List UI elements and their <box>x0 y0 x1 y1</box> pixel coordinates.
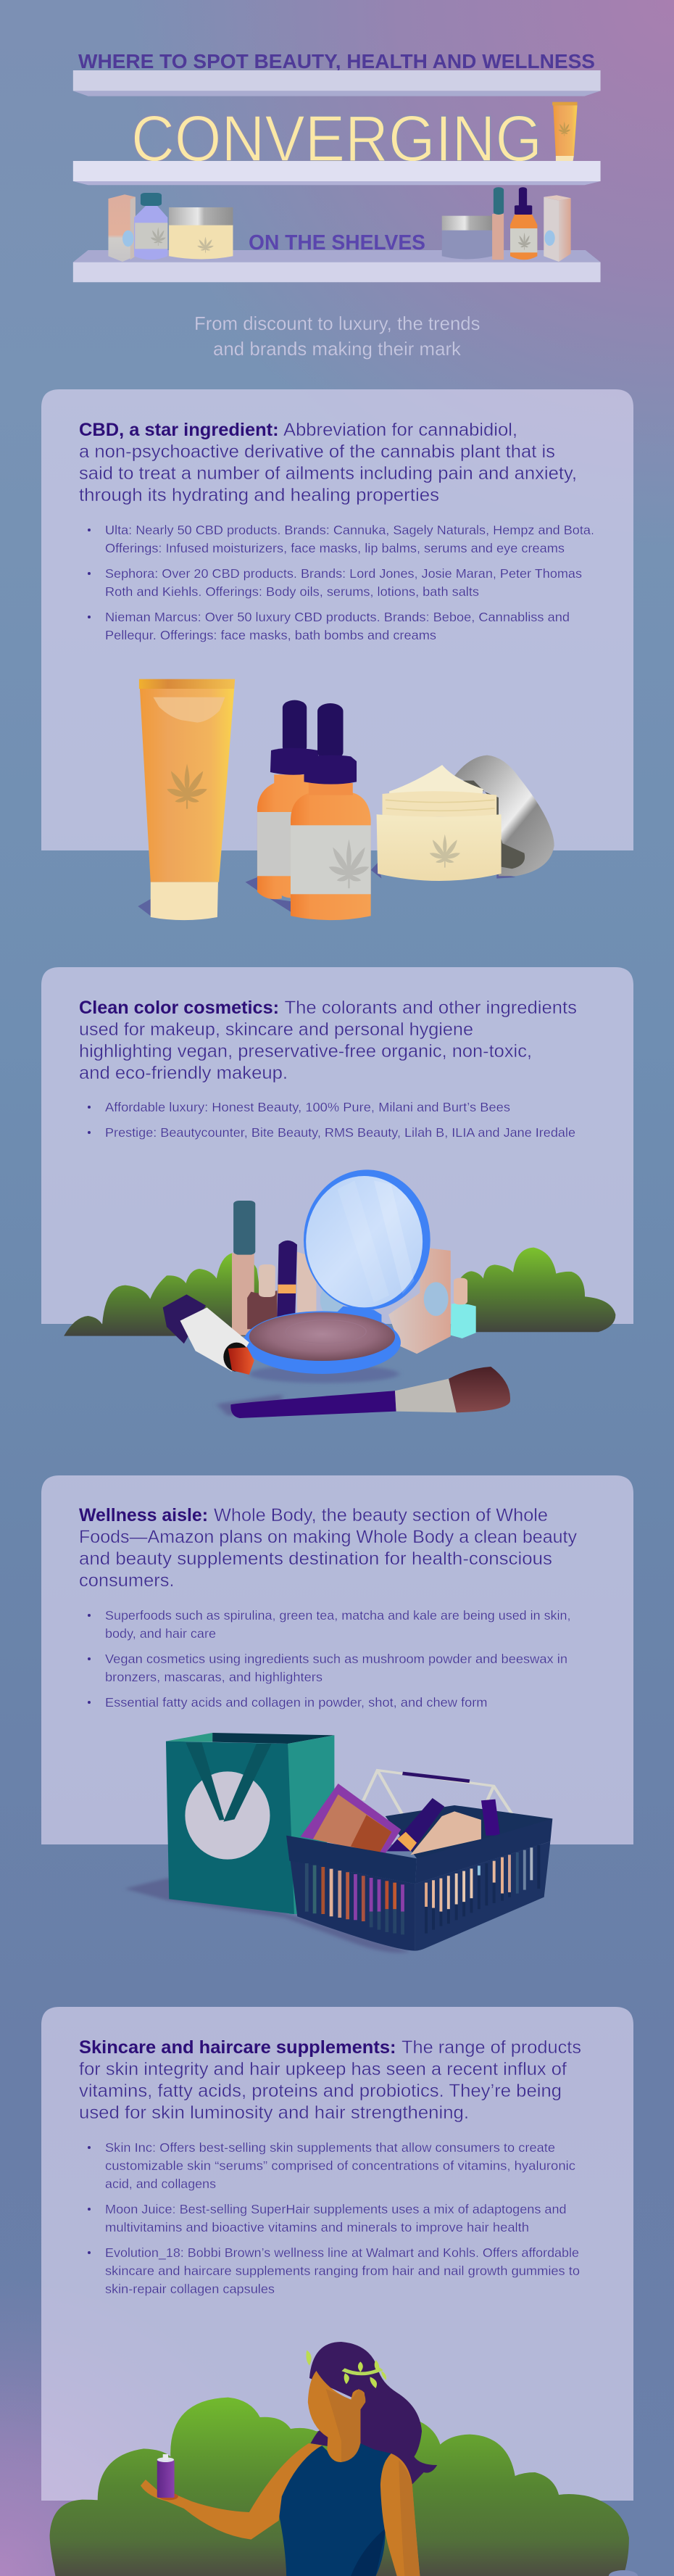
bullet list: supplements: Moon Juice: Best-selling SuperHair supplements uses a mix of adaptogens and <box>105 2202 567 2216</box>
header: shelves and title <box>73 50 601 282</box>
icon: left box <box>108 194 136 262</box>
icon: leaf crown <box>306 2351 386 2388</box>
illustration: woman with bush <box>50 2342 638 2576</box>
icon: right box <box>544 195 571 262</box>
icon: purple tube in basket <box>481 1800 500 1836</box>
panel: skincare and haircare supplements <box>41 2007 638 2576</box>
icon: nail polish <box>451 1278 476 1338</box>
heading: CBD: CBD, a star ingredient: <box>79 421 279 440</box>
bullet list: clean color brands: Affordable luxury: Honest Beauty, 100% Pure, Milani and Burt’s Bees <box>105 1100 510 1114</box>
shelves illustration <box>73 70 601 282</box>
icon: palette <box>301 1784 401 1854</box>
bullet list: CBD retailers: Sephora: Over 20 CBD products. Brands: Lord Jones, Josie Maran, Peter Thomas <box>105 566 582 581</box>
subtitle: From discount to luxury, the trends <box>194 312 480 334</box>
bullet list: supplements: acid, and collagens <box>105 2177 216 2191</box>
bullet list: wellness: bronzers, mascaras, and highlighters <box>105 1670 323 1684</box>
bullet list: supplements: Skin Inc: Offers best-selling skin supplements that allow consumers to create <box>105 2140 555 2155</box>
heading: clean color: The colorants and other ingredients <box>284 998 577 1018</box>
icon: woman <box>141 2342 437 2576</box>
heading: supplements <box>79 2038 581 2123</box>
icon: blue bottle <box>134 193 167 260</box>
bullet list: CBD retailers <box>88 523 594 642</box>
bullet list: clean color brands: Prestige: Beautycounter, Bite Beauty, RMS Beauty, Lilah B, ILIA and Jane Iredale <box>105 1125 575 1140</box>
heading: CBD: said to treat a number of ailments including pain and anxiety, <box>79 464 577 484</box>
icon: back dropper bottle <box>257 700 328 899</box>
illustration: bag and basket <box>125 1733 552 1952</box>
illustration: CBD products <box>138 679 554 920</box>
panel: wellness aisle <box>41 1475 633 1952</box>
bullet list: wellness: Vegan cosmetics using ingredients such as mushroom powder and beeswax in <box>105 1652 567 1666</box>
icon: open jar and lid <box>377 755 554 881</box>
icon: mascara in basket <box>387 1798 444 1851</box>
bullet list: supplements <box>88 2140 580 2296</box>
icon: box <box>297 1247 451 1354</box>
heading: clean color: highlighting vegan, preservative-free organic, non-toxic, <box>79 1042 532 1061</box>
heading: clean color: and eco-friendly makeup. <box>79 1064 288 1083</box>
bullet list: wellness <box>88 1608 571 1710</box>
bullet list: wellness: Superfoods such as spirulina, green tea, matcha and kale are being used in skin, <box>105 1608 571 1623</box>
icon: product bottle <box>157 2454 175 2498</box>
bullet list: clean color brands <box>88 1100 575 1140</box>
heading: supplements: for skin integrity and hair upkeep has seen a recent influx of <box>79 2060 567 2079</box>
heading: wellness aisle: and beauty supplements destination for health-conscious <box>79 1549 552 1569</box>
heading: supplements: used for skin luminosity and hair strengthening. <box>79 2103 469 2123</box>
heading: CBD <box>79 421 577 505</box>
icon: basket handle <box>363 1771 520 1827</box>
icon: pencil <box>492 187 504 260</box>
icon: lipstick <box>163 1294 254 1375</box>
icon: front dropper bottle <box>291 703 371 920</box>
bullet list: CBD retailers: Roth and Kiehls. Offerings: Body oils, serums, lotions, bath salts <box>105 584 479 599</box>
illustration: cosmetics <box>64 1169 615 1418</box>
heading: wellness aisle <box>79 1506 578 1591</box>
heading: clean color: used for makeup, skincare and personal hygiene <box>79 1020 473 1040</box>
icon: foundation stick <box>232 1201 255 1335</box>
heading: wellness aisle: Foods—Amazon plans on making Whole Body a clean beauty <box>79 1528 578 1547</box>
heading: wellness aisle: Wellness aisle: <box>79 1506 208 1525</box>
icon: box in basket <box>410 1811 481 1855</box>
icon: small tube <box>552 102 578 161</box>
icon: bush <box>50 2398 629 2576</box>
icon: right bush <box>458 1248 615 1332</box>
heading: supplements: The range of products <box>402 2038 581 2058</box>
icon: left bush <box>64 1253 267 1336</box>
icon: tube <box>139 679 235 920</box>
icon: makeup brush <box>217 1367 510 1418</box>
bullet list: supplements: multivitamins and bioactive vitamins and minerals to improve hair health <box>105 2220 529 2235</box>
heading: supplements: vitamins, fatty acids, proteins and probiotics. They’re being <box>79 2082 562 2101</box>
heading: CBD: a non-psychoactive derivative of the cannabis plant that is <box>79 442 555 462</box>
heading: wellness aisle: consumers. <box>79 1571 174 1591</box>
bullet list: supplements: skin-repair collagen capsules <box>105 2282 275 2296</box>
icon: brown bottle <box>247 1264 277 1329</box>
title: converging: CONVERGING <box>131 103 542 175</box>
title: where to spot: WHERE TO SPOT BEAUTY, HEALTH AND WELLNESS <box>78 50 595 73</box>
panel: CBD <box>41 389 633 920</box>
bullet list: supplements: customizable skin “serums” comprised of concentrations of vitamins, hyaluronic <box>105 2158 575 2173</box>
bullet list: supplements: skincare and haircare supplements ranging from hair and nail growth gummies to <box>105 2264 580 2278</box>
heading: CBD: through its hydrating and healing properties <box>79 486 439 505</box>
bullet list: wellness: Essential fatty acids and collagen in powder, shot, and chew form <box>105 1695 487 1710</box>
heading: clean color <box>79 998 577 1083</box>
icon: shopping bag <box>166 1733 334 1914</box>
bullet list: CBD retailers: Nieman Marcus: Over 50 luxury CBD products. Brands: Beboe, Cannabliss and <box>105 610 570 624</box>
bullet list: CBD retailers: Pellequr. Offerings: face masks, bath bombs and creams <box>105 628 436 642</box>
icon: basket front <box>286 1818 552 1951</box>
icon: cream jar <box>169 207 233 259</box>
bullet list: wellness: body, and hair care <box>105 1626 216 1641</box>
icon: lavender jar <box>442 216 493 259</box>
bullet list: CBD retailers: Offerings: Infused moisturizers, face masks, lip balms, serums and eye creams <box>105 541 565 555</box>
text: on the shelves: ON THE SHELVES <box>249 231 425 254</box>
icon: mascara <box>277 1241 297 1317</box>
bullet list: supplements: Evolution_18: Bobbi Brown’s wellness line at Walmart and Kohls. Offers affordable <box>105 2245 579 2261</box>
icon: orange dropper bottle <box>510 187 537 260</box>
subtitle <box>194 312 480 360</box>
subtitle: and brands making their mark <box>213 338 462 360</box>
panel: clean color cosmetics <box>41 967 633 1418</box>
heading: clean color: Clean color cosmetics: <box>79 998 279 1018</box>
heading: supplements: Skincare and haircare supplements: <box>79 2038 396 2058</box>
bullet list: CBD retailers: Ulta: Nearly 50 CBD products. Brands: Cannuka, Sagely Naturals, Hempz and Bota. <box>105 523 594 537</box>
heading: wellness aisle: Whole Body, the beauty section of Whole <box>214 1506 548 1525</box>
icon: compact mirror <box>244 1169 430 1374</box>
heading: CBD: Abbreviation for cannabidiol, <box>283 421 517 440</box>
